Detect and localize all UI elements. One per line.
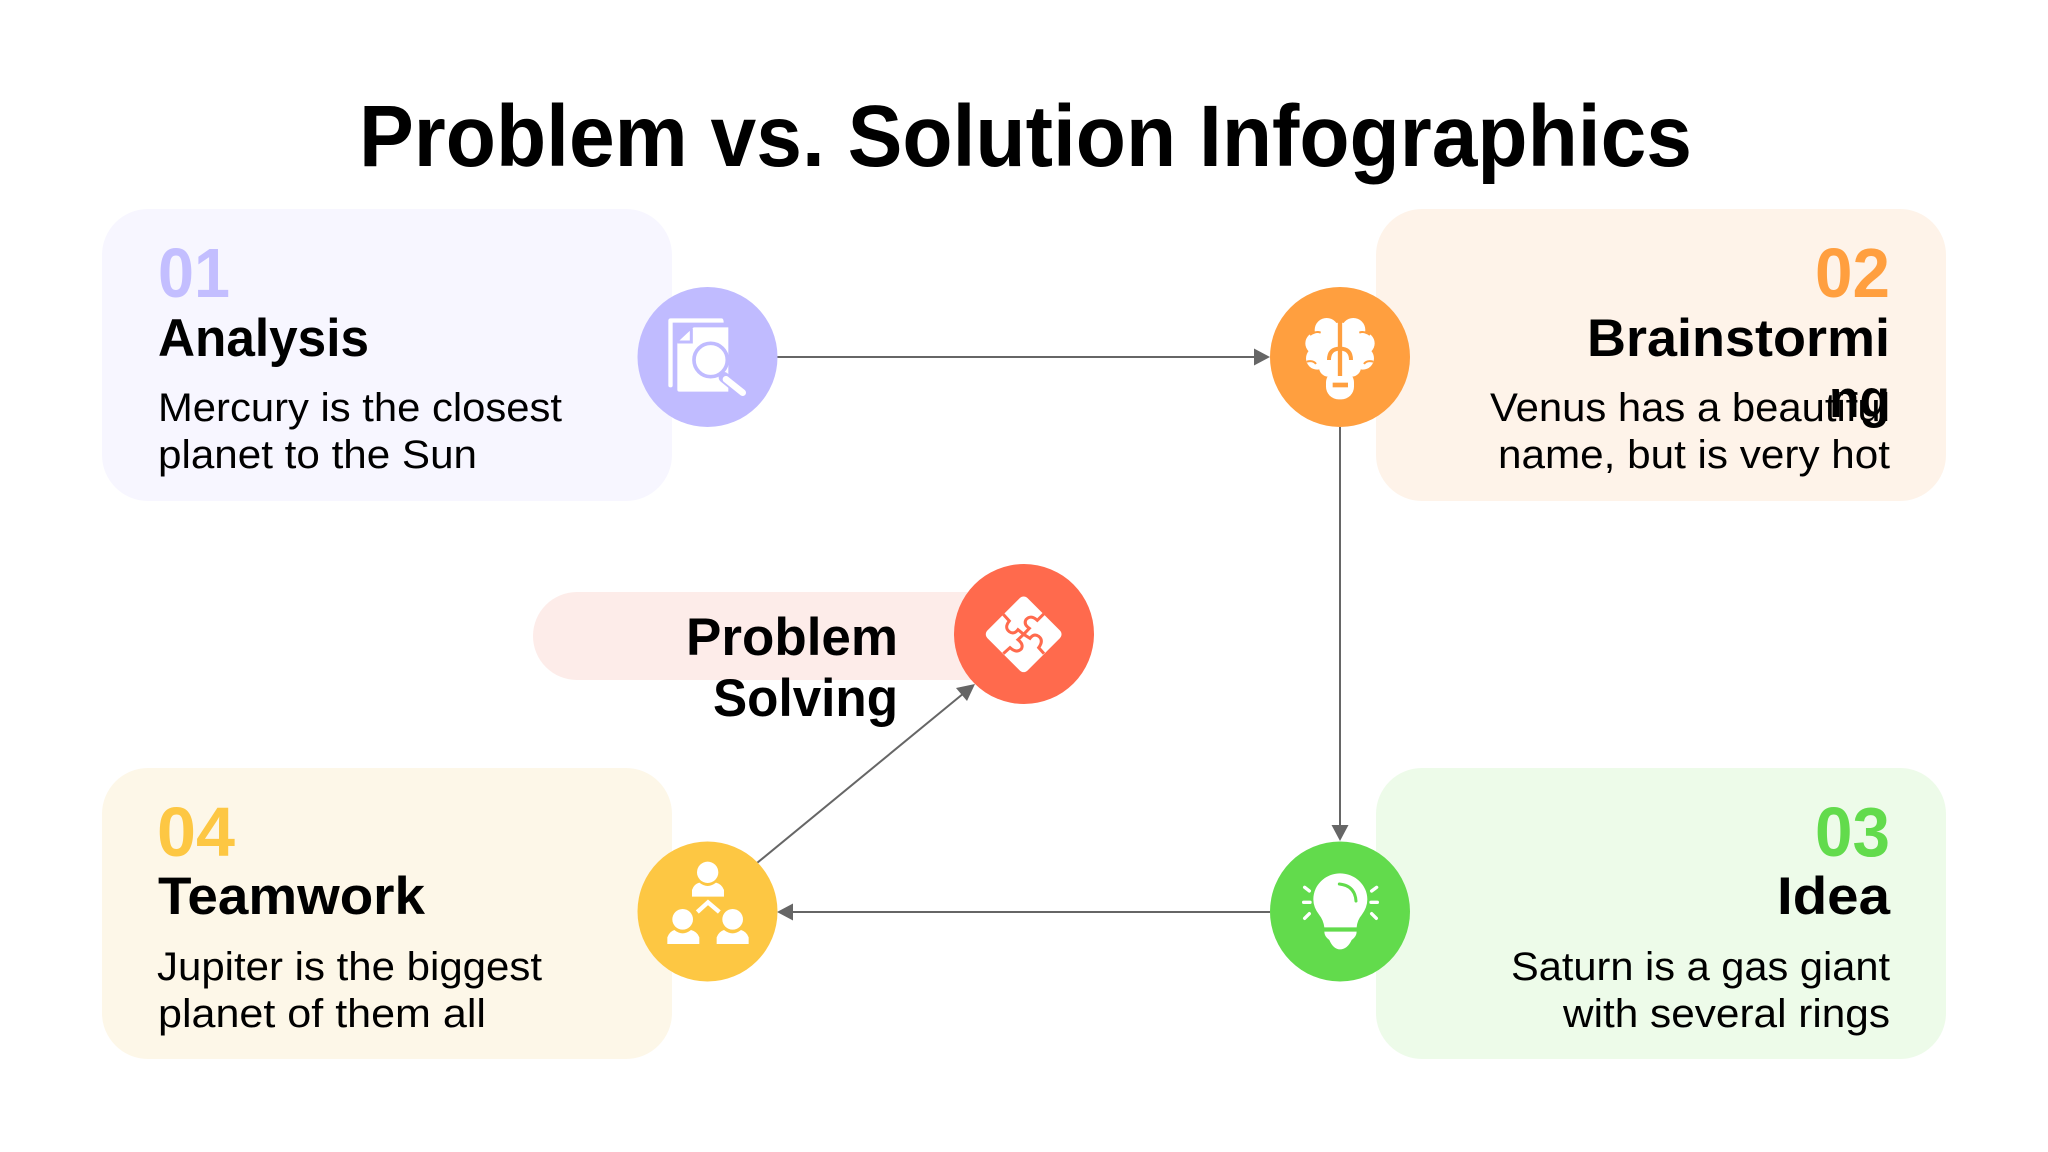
description: Teamwork: Jupiter is the biggest — [157, 945, 542, 989]
description: Analysis — [158, 386, 562, 477]
icon: teamwork — [638, 842, 778, 982]
heading: Analysis: Analysis — [158, 309, 369, 368]
description: Analysis: planet to the Sun — [158, 433, 477, 477]
panel: 03 Idea — [1376, 768, 1946, 1059]
heading: Brainstorming — [1587, 309, 1890, 429]
number 02: 02 — [1815, 234, 1890, 312]
icon: document search — [638, 287, 778, 427]
description: Idea: Saturn is a gas giant — [1511, 945, 1890, 989]
description: Analysis: Mercury is the closest — [158, 386, 562, 430]
arrow: Brainstorming to Idea — [1332, 427, 1348, 841]
description: Teamwork: planet of them all — [158, 992, 486, 1036]
description: Brainstorming: name, but is very hot — [1498, 433, 1890, 477]
label: Problem Solving: Solving — [713, 669, 898, 728]
heading: Idea: Idea — [1777, 867, 1891, 926]
title: Problem vs. Solution Infographics — [359, 88, 1692, 185]
icon: light bulb — [1270, 842, 1410, 982]
panel: 01 Analysis — [102, 209, 672, 501]
description: Brainstorming: Venus has a beautiful — [1490, 386, 1890, 430]
number 01: 01 — [158, 234, 230, 312]
arrow: Analysis to Brainstorming — [777, 348, 1270, 366]
description: Idea — [1511, 945, 1890, 1036]
panel: 04 Teamwork — [102, 768, 672, 1059]
description: Idea: with several rings — [1562, 992, 1890, 1036]
heading: Brainstorming: ng — [1829, 370, 1890, 429]
heading: Brainstorming: Brainstormi — [1587, 309, 1890, 368]
description: Teamwork — [157, 945, 542, 1036]
panel: 02 Brainstorming — [1376, 209, 1946, 501]
icon: puzzle — [954, 564, 1094, 704]
description: Brainstorming — [1490, 386, 1890, 477]
number 04: 04 — [157, 793, 235, 871]
label: Problem Solving — [686, 608, 898, 728]
arrow: Teamwork to Problem Solving — [757, 684, 975, 863]
heading: Teamwork: Teamwork — [158, 867, 426, 926]
label: Problem Solving: Problem — [686, 608, 898, 667]
panel: Problem Solving pill — [533, 592, 1023, 680]
arrow: Idea to Teamwork — [777, 904, 1270, 920]
number 03: 03 — [1815, 793, 1890, 871]
icon: brain — [1270, 287, 1410, 427]
